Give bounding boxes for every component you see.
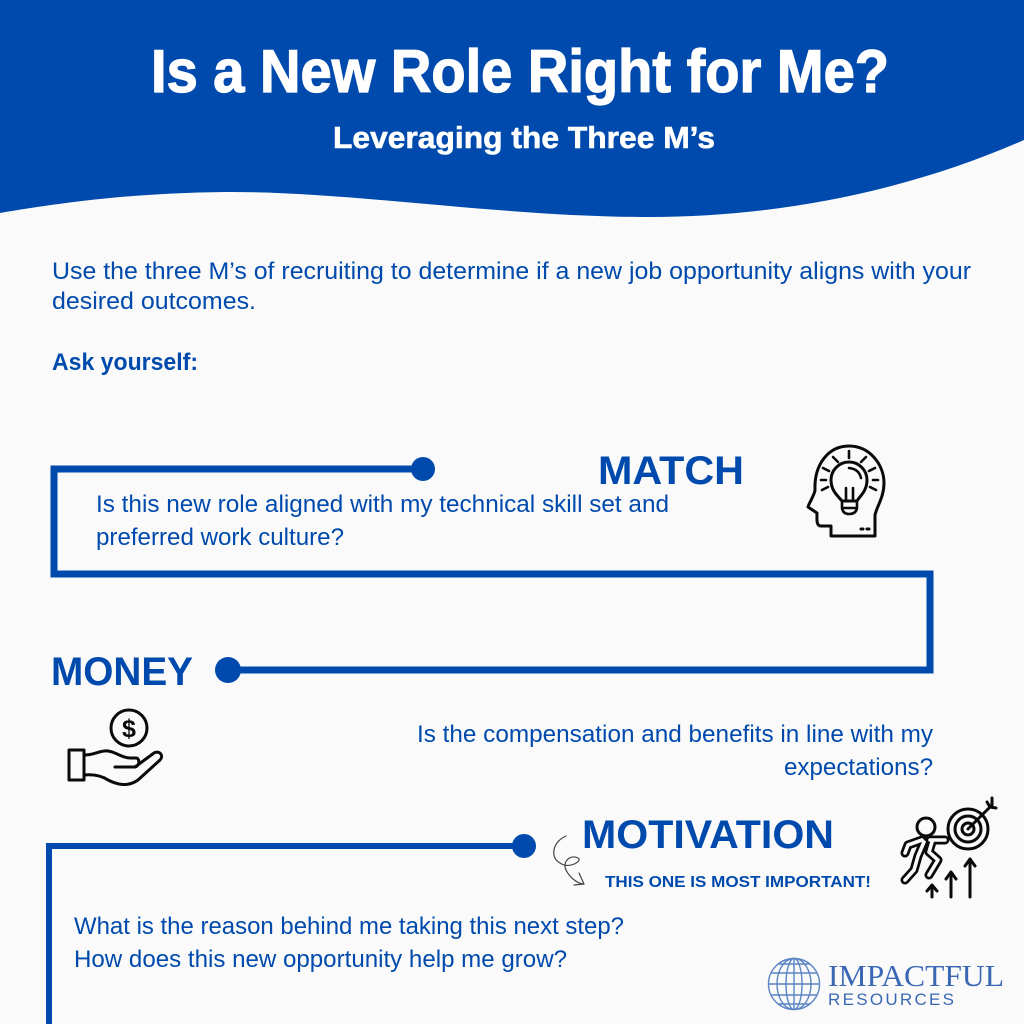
match heading: MATCH xyxy=(598,449,744,493)
icon: runner, target and arrows xyxy=(905,798,996,897)
match text xyxy=(96,491,669,551)
motivation text: What is the reason behind me taking this next step? xyxy=(74,913,624,940)
subtitle: Leveraging the Three M’s xyxy=(333,120,715,155)
motivation text xyxy=(74,913,624,973)
logo: Impactful Resources xyxy=(768,958,1004,1010)
icon: curly arrow xyxy=(554,836,584,885)
icon: head with light bulb xyxy=(808,446,884,536)
icon: hand holding coin xyxy=(69,710,162,785)
most important note: THIS ONE IS MOST IMPORTANT! xyxy=(605,874,871,891)
title: Is a New Role Right for Me? xyxy=(151,38,889,105)
ask yourself label: Ask yourself: xyxy=(52,349,198,376)
logo wordmark: IMPACTFUL xyxy=(828,958,1004,993)
icon: hand holding coin: $ xyxy=(122,715,136,743)
logo subline: RESOURCES xyxy=(828,990,954,1009)
match text: Is this new role aligned with my technical skill set and xyxy=(96,491,669,518)
money text xyxy=(417,721,933,781)
motivation heading: MOTIVATION xyxy=(582,813,834,857)
connector: motivation xyxy=(49,834,536,1024)
header banner xyxy=(0,0,1024,217)
logo globe xyxy=(768,958,820,1010)
money heading: MONEY xyxy=(51,650,193,694)
connector: match to money xyxy=(54,457,930,683)
money text: expectations? xyxy=(784,754,933,781)
intro text xyxy=(52,258,971,315)
intro text: desired outcomes. xyxy=(52,288,256,315)
match text: preferred work culture? xyxy=(96,524,344,551)
intro text: Use the three M’s of recruiting to determine if a new job opportunity aligns with your xyxy=(52,258,971,285)
motivation text: How does this new opportunity help me grow? xyxy=(74,946,567,973)
money text: Is the compensation and benefits in line with my xyxy=(417,721,933,748)
